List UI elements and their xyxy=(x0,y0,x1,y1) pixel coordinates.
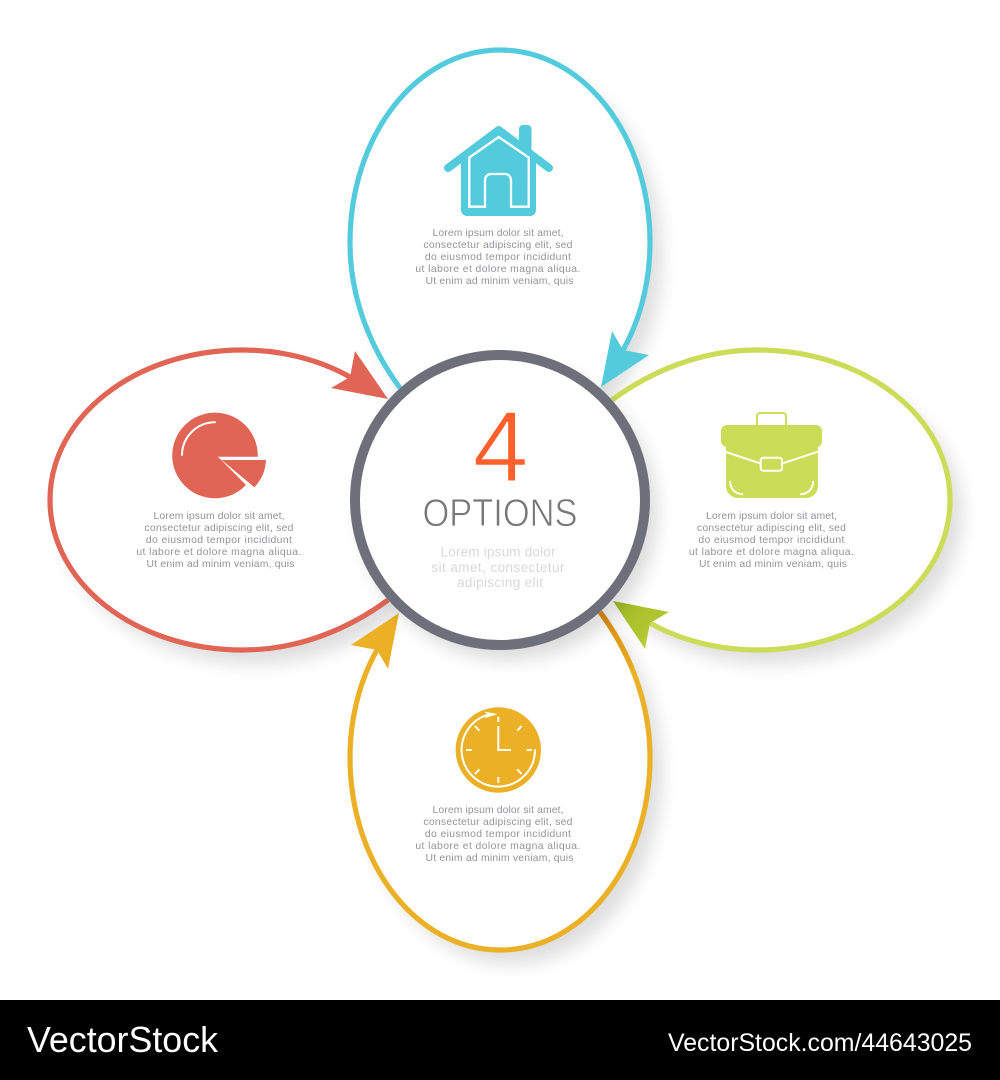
lime oval arc xyxy=(612,350,950,650)
icon: clock xyxy=(456,707,541,793)
yellow oval arc xyxy=(350,612,650,950)
panel: right lime oval xyxy=(612,350,950,650)
center description: Lorem ipsum dolor xyxy=(441,544,556,560)
text block: left: Lorem ipsum dolor sit amet, xyxy=(154,511,285,522)
icon: pie chart xyxy=(172,413,266,498)
text block: left: consectetur adipiscing elit, sed xyxy=(144,523,294,534)
text block: right: Lorem ipsum dolor sit amet, xyxy=(706,511,837,522)
red oval arc xyxy=(50,350,388,650)
blue arrowhead xyxy=(601,331,649,387)
text block: right: ut labore et dolore magna aliqua. xyxy=(689,547,854,558)
text block: left: ut labore et dolore magna aliqua. xyxy=(136,547,301,558)
text block: bottom: consectetur adipiscing elit, sed xyxy=(423,817,573,828)
center description: sit amet, consectetur xyxy=(431,560,565,575)
text block: bottom: Ut enim ad minim veniam, quis xyxy=(426,853,574,864)
heading: OPTIONS: OPTIONS xyxy=(422,492,578,535)
red arrowhead xyxy=(331,351,388,399)
text block: right: do eiusmod tempor incididunt xyxy=(698,535,844,546)
icon: house xyxy=(448,125,549,216)
center description: adipiscing elit xyxy=(457,575,543,590)
watermark bar xyxy=(0,1000,1000,1080)
center circle shadow xyxy=(361,364,657,660)
text block: top: do eiusmod tempor incididunt xyxy=(425,252,571,263)
text block: top: consectetur adipiscing elit, sed xyxy=(423,240,573,251)
watermark logo: VectorStock xyxy=(27,1019,219,1060)
big number 4: 4 xyxy=(473,391,528,503)
panel: bottom yellow oval xyxy=(350,612,650,950)
watermark url: VectorStock.com/44643025 xyxy=(668,1029,972,1057)
text block: bottom: Lorem ipsum dolor sit amet, xyxy=(433,805,564,816)
text block: right: Ut enim ad minim veniam, quis xyxy=(699,559,847,570)
panel: top blue oval xyxy=(350,50,650,388)
darker start of yellow arc xyxy=(600,612,632,668)
icon: briefcase xyxy=(721,413,822,498)
text block: bottom: do eiusmod tempor incididunt xyxy=(425,829,571,840)
center ring xyxy=(355,355,645,645)
panel: left red oval xyxy=(50,350,388,650)
yellow arrowhead xyxy=(351,613,399,669)
text block: right: consectetur adipiscing elit, sed xyxy=(697,523,846,534)
white oval fills xyxy=(50,50,950,950)
text block: bottom: ut labore et dolore magna aliqua. xyxy=(415,841,580,852)
text block: left: do eiusmod tempor incididunt xyxy=(146,535,292,546)
panel: center circle xyxy=(355,355,645,645)
text block: top: Lorem ipsum dolor sit amet, xyxy=(433,228,564,239)
text block: top: ut labore et dolore magna aliqua. xyxy=(415,264,580,275)
lime arrowhead xyxy=(613,601,669,649)
blue oval arc xyxy=(350,50,650,388)
text block: left: Ut enim ad minim veniam, quis xyxy=(146,559,294,570)
text block: top: Ut enim ad minim veniam, quis xyxy=(426,276,574,287)
soft shadows behind ovals xyxy=(62,64,962,964)
